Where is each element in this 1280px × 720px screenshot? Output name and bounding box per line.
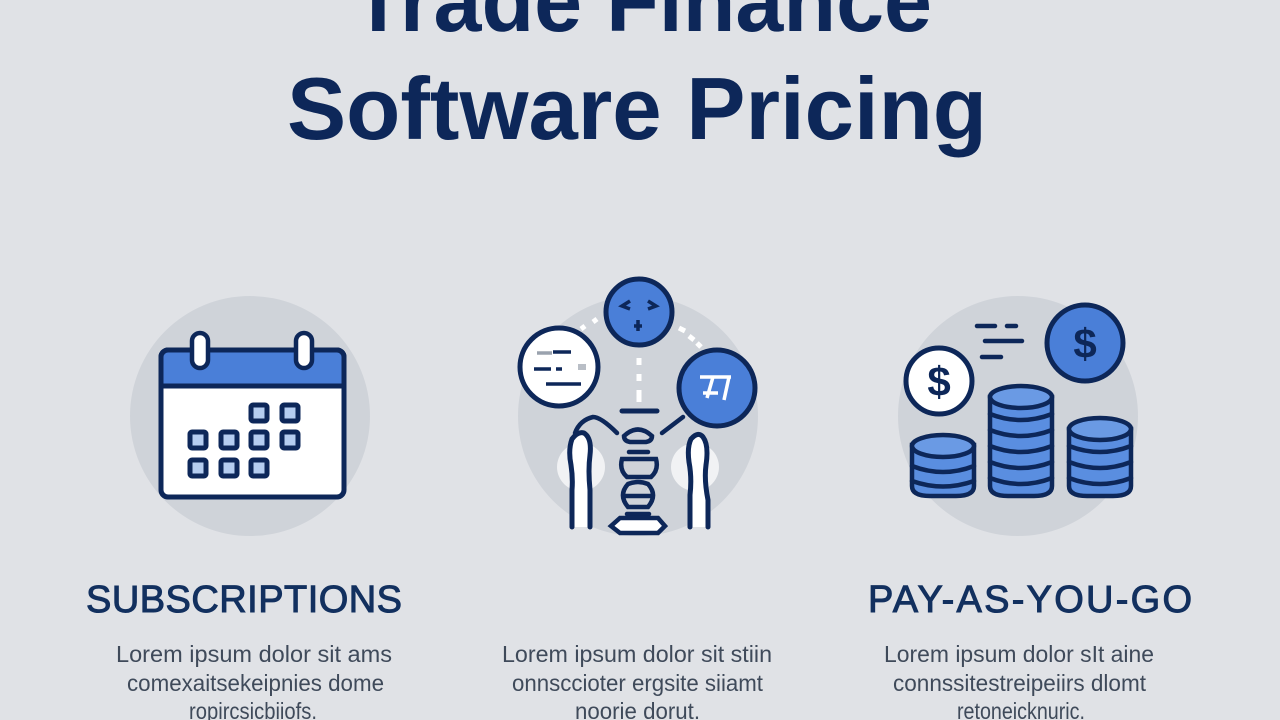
heading: subscriptions: SUBSCRIPTIONS (86, 579, 402, 621)
left circle (520, 328, 598, 406)
coin stack: left (912, 435, 974, 496)
text block: subscriptions description: comexaitsekeipnies dome (127, 670, 384, 696)
icon: calendar (130, 296, 370, 536)
text block: subscriptions description (116, 641, 392, 720)
title: Software Pricing (287, 59, 987, 158)
right circle (679, 350, 755, 426)
text block: hybrid description: Lorem ipsum dolor sit stiin (502, 641, 772, 667)
large coin (1047, 305, 1123, 381)
panel: hybrid model (502, 279, 772, 720)
text block: subscriptions description: Lorem ipsum dolor sit ams (116, 641, 392, 667)
coin stack: middle (990, 386, 1052, 496)
large coin: $ (1073, 320, 1097, 367)
small coin (906, 348, 972, 414)
text block: hybrid description (502, 641, 772, 720)
text block: hybrid description: onnsccioter ergsite siiamt (512, 670, 764, 696)
top circle (606, 279, 672, 345)
text block: pay-as-you-go description (884, 641, 1154, 720)
text block: pay-as-you-go description: Lorem ipsum dolor sIt aine (884, 641, 1154, 667)
text block: pay-as-you-go description: connssitestreipeiirs dlomt (893, 670, 1147, 696)
icon: coins (898, 296, 1138, 536)
heading: pay-as-you-go: PAY-AS-YOU-GO (868, 579, 1192, 621)
panel: subscriptions (86, 296, 402, 720)
icon: connected circles and figures (518, 279, 758, 536)
coin stack: right (1069, 418, 1131, 496)
small coin: $ (927, 358, 951, 405)
title (287, 0, 987, 158)
panel: pay-as-you-go (868, 296, 1192, 720)
